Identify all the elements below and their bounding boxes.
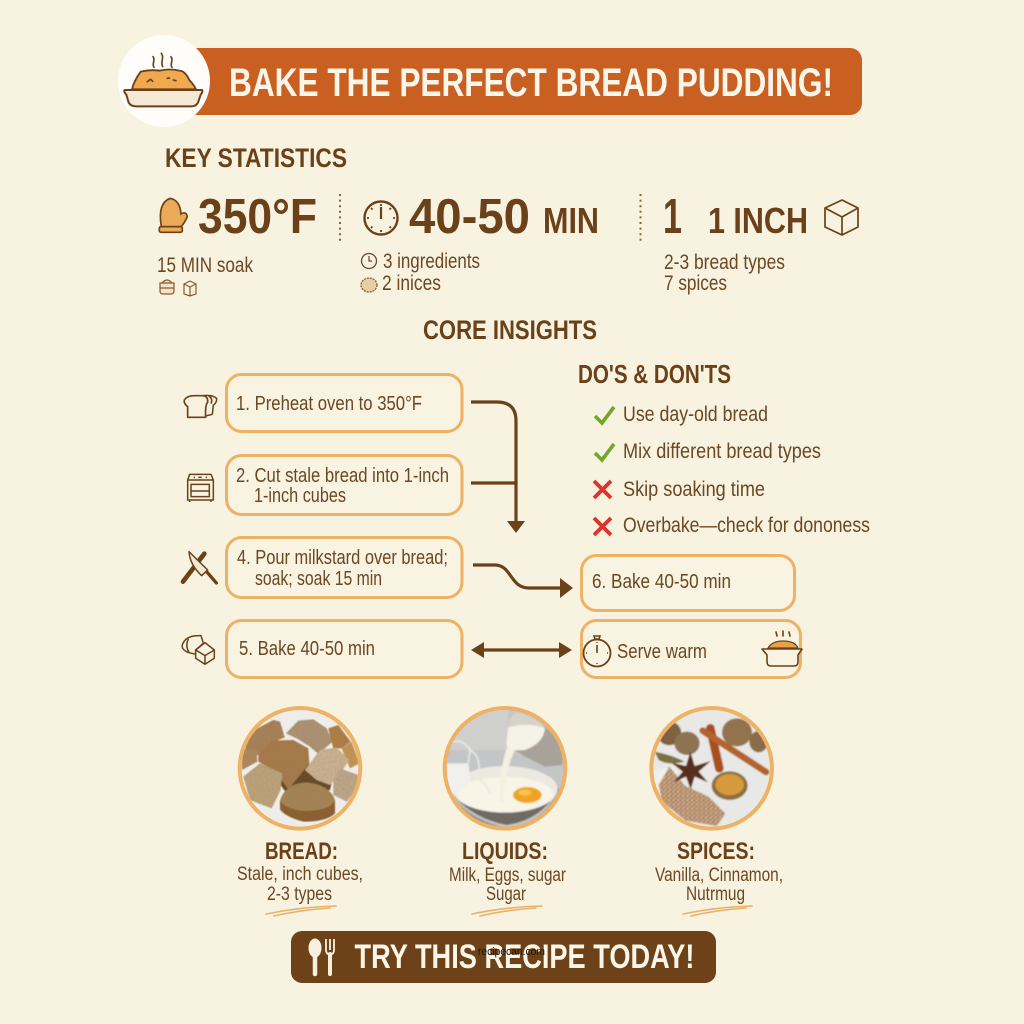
title banner — [190, 48, 862, 115]
photo: milk pouring into bowl with egg — [442, 706, 568, 833]
don't: overbake: Overbake—check for dononess — [623, 514, 870, 537]
stat note: ingredients and spices: 3 ingredients — [383, 250, 480, 273]
step 4 — [226, 538, 462, 598]
step 6 — [582, 556, 794, 610]
heading: do's and don'ts: DO'S & DON'TS — [578, 359, 731, 389]
stat note: bread types and spices: 2-3 bread types — [664, 251, 785, 274]
stat: 40-50 min with clock: 40-50 — [409, 190, 530, 244]
step: serve warm — [582, 620, 802, 678]
icon: casserole — [762, 631, 802, 666]
step 4: soak; soak 15 min — [255, 568, 382, 590]
stat: 1 inch cube: 1 — [663, 190, 682, 244]
step 2: 1-inch cubes — [254, 485, 346, 507]
step 1 — [226, 374, 462, 432]
step: serve warm: Serve warm — [617, 641, 707, 663]
call to action button — [291, 931, 716, 983]
stat note: 15 min soak — [157, 254, 253, 296]
stat: 350°F with oven mitt: 350°F — [198, 190, 317, 244]
ingredient: liquids: LIQUIDS: — [462, 838, 548, 865]
ingredient: bread: BREAD: — [265, 838, 338, 865]
stat: 1 inch cube — [663, 190, 858, 244]
ingredient: liquids: Sugar — [486, 884, 527, 905]
stat note: bread types and spices — [664, 251, 785, 295]
stat: 40-50 min with clock: MIN — [543, 200, 599, 241]
title text: BAKE THE PERFECT BREAD PUDDING! — [229, 61, 833, 105]
step 1: 1. Preheat oven to 350°F — [236, 393, 422, 415]
icon: bread and cube — [182, 636, 214, 664]
ingredient: spices — [655, 838, 783, 916]
stat: 1 inch cube: 1 INCH — [708, 200, 808, 241]
photo: bread cubes — [237, 706, 363, 831]
icon: cube — [825, 200, 858, 235]
ingredient: liquids: Milk, Eggs, sugar — [449, 865, 567, 886]
step 5 — [226, 620, 462, 678]
icon: spoon and fork — [308, 938, 334, 974]
stat note: ingredients and spices — [361, 250, 480, 295]
do: use day-old bread: Use day-old bread — [623, 403, 768, 426]
ingredient: bread — [237, 838, 363, 916]
don't: skip soaking: Skip soaking time — [623, 478, 765, 501]
arrow: steps 1 and 2 down — [471, 402, 525, 533]
icon: stopwatch — [584, 636, 610, 666]
arrow: double-headed between step 5 and serve — [471, 642, 572, 658]
ingredient: spices: Nutrmug — [686, 884, 745, 905]
ingredient: spices: Vanilla, Cinnamon, — [655, 865, 783, 886]
icon: crossed knife and rolling pin — [183, 552, 216, 583]
step 4: 4. Pour milkstard over bread; — [237, 547, 448, 569]
step 6: 6. Bake 40-50 min — [592, 571, 731, 593]
call to action button: TRY THIS RECIPE TODAY! — [354, 938, 694, 976]
ingredient: spices: SPICES: — [677, 838, 755, 865]
stat note: ingredients and spices: 2 inices — [382, 272, 441, 295]
stat: 40-50 min with clock — [364, 190, 599, 244]
heading: core insights: CORE INSIGHTS — [423, 315, 597, 345]
stat note: bread types and spices: 7 spices — [664, 272, 727, 295]
ingredient: bread: 2-3 types — [267, 884, 332, 905]
watermark: recipecan.com — [478, 946, 545, 958]
icon: oven — [188, 474, 213, 502]
step 2 — [226, 456, 462, 514]
icon: bread slice — [184, 395, 217, 417]
arrow: step 4 to step 6 — [473, 565, 573, 598]
step 5: 5. Bake 40-50 min — [239, 638, 375, 660]
ingredient: bread: Stale, inch cubes, — [237, 864, 363, 885]
icon: oven mitt — [159, 198, 187, 232]
step 2: 2. Cut stale bread into 1-inch — [236, 465, 449, 487]
stat note: 15 min soak: 15 MIN soak — [157, 254, 253, 277]
ingredient: liquids — [449, 838, 567, 916]
do: mix bread types: Mix different bread types — [623, 440, 821, 463]
icon: bread pudding dish in white circle — [118, 35, 210, 127]
photo: spices — [649, 706, 775, 831]
icon: clock — [364, 202, 398, 234]
heading: key statistics: KEY STATISTICS — [165, 143, 347, 173]
